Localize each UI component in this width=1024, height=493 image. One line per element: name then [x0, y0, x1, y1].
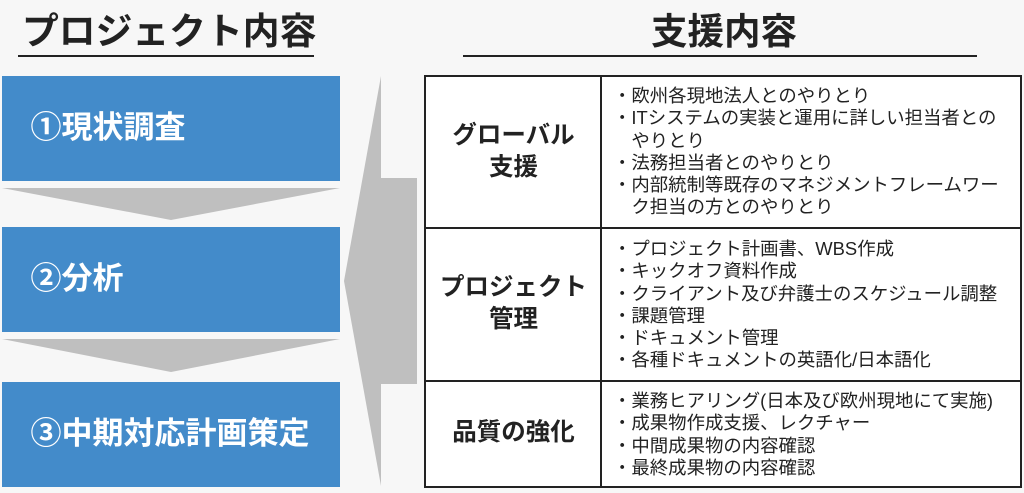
- arrow: step 1 to 2: [2, 188, 340, 220]
- step 3: mid-term plan: ③中期対応計画策定: [30, 416, 310, 451]
- step 2: analysis: ②分析: [30, 261, 124, 296]
- row 2 list: ・プロジェクト計画書、WBS作成: [613, 238, 894, 259]
- row 1 list: やりとり: [631, 130, 705, 151]
- row 2 list: ・各種ドキュメントの英語化/日本語化: [613, 349, 931, 370]
- row 2 list: ・課題管理: [613, 305, 705, 326]
- row 1 list: ・欧州各現地法人とのやりとり: [613, 85, 870, 106]
- row label: project management: [440, 274, 587, 332]
- step 1: current state survey: [2, 76, 340, 181]
- row label: project management: 管理: [489, 306, 538, 332]
- row 1 list: ・ITシステムの実装と運用に詳しい担当者との: [613, 107, 996, 128]
- support table: [424, 75, 1022, 488]
- row 2 list: ・クライアント及び弁護士のスケジュール調整: [613, 283, 997, 304]
- row 2 list: ・ドキュメント管理: [613, 327, 779, 348]
- step 1: current state survey: ①現状調査: [30, 110, 186, 145]
- row 3 list: ・最終成果物の内容確認: [613, 457, 815, 478]
- row label: global support: グローバル: [452, 122, 575, 149]
- heading: support content: [463, 13, 977, 57]
- row 1 list: [613, 85, 999, 217]
- arrow: large left arrow: [344, 76, 417, 486]
- row 1 list: ・内部統制等既存のマネジメントフレームワー: [613, 174, 999, 195]
- arrow: step 2 to 3: [2, 339, 340, 372]
- row 2 list: ・キックオフ資料作成: [613, 260, 797, 281]
- row 2 list: [613, 238, 997, 370]
- row label: global support: 支援: [489, 154, 538, 180]
- row 3 list: [613, 390, 993, 478]
- step 3: mid-term plan: [2, 382, 340, 487]
- row label: project management: プロジェクト: [440, 274, 587, 301]
- row 3 list: ・中間成果物の内容確認: [613, 435, 815, 456]
- row label: quality improvement: 品質の強化: [452, 419, 575, 446]
- row 3 list: ・成果物作成支援、レクチャー: [613, 412, 870, 433]
- row 1 list: ク担当の方とのやりとり: [631, 196, 834, 217]
- heading: support content: 支援内容: [651, 11, 797, 52]
- heading: project content: プロジェクト内容: [22, 11, 316, 52]
- row label: global support: [452, 122, 575, 180]
- step 2: analysis: [2, 227, 340, 332]
- row 1 list: ・法務担当者とのやりとり: [613, 152, 834, 173]
- row 3 list: ・業務ヒアリング(日本及び欧州現地にて実施): [613, 390, 993, 411]
